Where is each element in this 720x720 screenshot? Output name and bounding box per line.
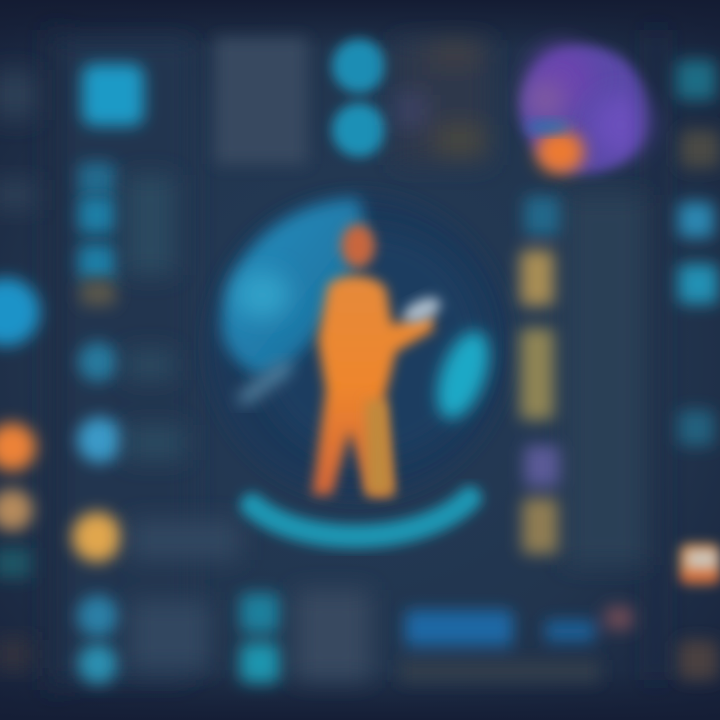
pie chart [521, 46, 652, 174]
bottom right chart band [400, 606, 633, 682]
bottom centre icons [240, 593, 280, 683]
left column text blocks [125, 175, 240, 670]
top right-centre text panel [395, 40, 490, 165]
far right icons [676, 60, 720, 680]
person figure [312, 224, 444, 495]
central circle [206, 193, 510, 497]
left edge icons [0, 70, 40, 668]
globe blue area [222, 198, 364, 398]
left column panel [48, 30, 192, 690]
bottom centre text panel [295, 590, 370, 680]
top centre text panel [215, 38, 307, 164]
left column icons [72, 64, 144, 684]
teal arc [252, 498, 470, 536]
right column panel [565, 30, 662, 680]
right column icons [520, 196, 560, 554]
far right orange icon [680, 544, 720, 584]
teal ellipse [427, 324, 499, 426]
top centre icons [332, 39, 386, 157]
